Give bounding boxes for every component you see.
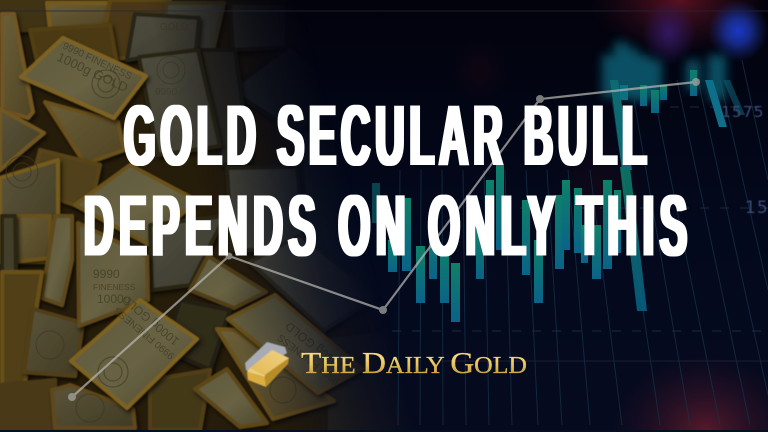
- embossed bar markings: 1000g GOLD: [282, 319, 347, 374]
- panel: coloured glow lights: [450, 0, 768, 432]
- chart: axis price labels: 1575: [721, 103, 764, 121]
- bottom edge strip: [0, 430, 768, 432]
- embossed bar markings: 1000g: [97, 292, 130, 306]
- icon: gold ingot: [245, 342, 289, 387]
- title line 1: GOLD SECULAR BULL: [124, 88, 647, 184]
- embossed bar markings: 9990 FINENESS: [61, 41, 134, 83]
- chart: grey trend line with markers: [68, 78, 700, 401]
- chart: axis price labels: 15: [745, 198, 768, 218]
- embossed bar markings: 9990: [93, 267, 120, 281]
- embossed bar markings: [55, 22, 347, 386]
- logo: The Daily Gold: [245, 342, 527, 387]
- embossed bar markings: 1000g GOLD: [55, 49, 131, 95]
- embossed bar seals: [6, 56, 296, 422]
- embossed bar markings: GOLD: [160, 22, 188, 33]
- embossed bar markings: 1000g GOLD: [119, 292, 182, 348]
- chart: sharper candlesticks: [372, 70, 745, 322]
- title line 2: DEPENDS ON ONLY THIS: [84, 177, 687, 275]
- panel: stack of gold bars photo: [0, 0, 382, 430]
- embossed bar markings: 9990: [155, 87, 178, 98]
- chart: axis price labels: [721, 103, 768, 218]
- dark tone over photo: [0, 0, 335, 430]
- title: [84, 88, 687, 275]
- embossed bar markings: 9990 FINENESS: [112, 304, 177, 361]
- embossed bar markings: FINENESS: [93, 282, 136, 292]
- embossed bar markings: 9990 FINENESS: [276, 331, 342, 386]
- logo wordmark: THE DAILY GOLD: [301, 345, 527, 380]
- chart: blurred upper candlesticks: [602, 42, 726, 101]
